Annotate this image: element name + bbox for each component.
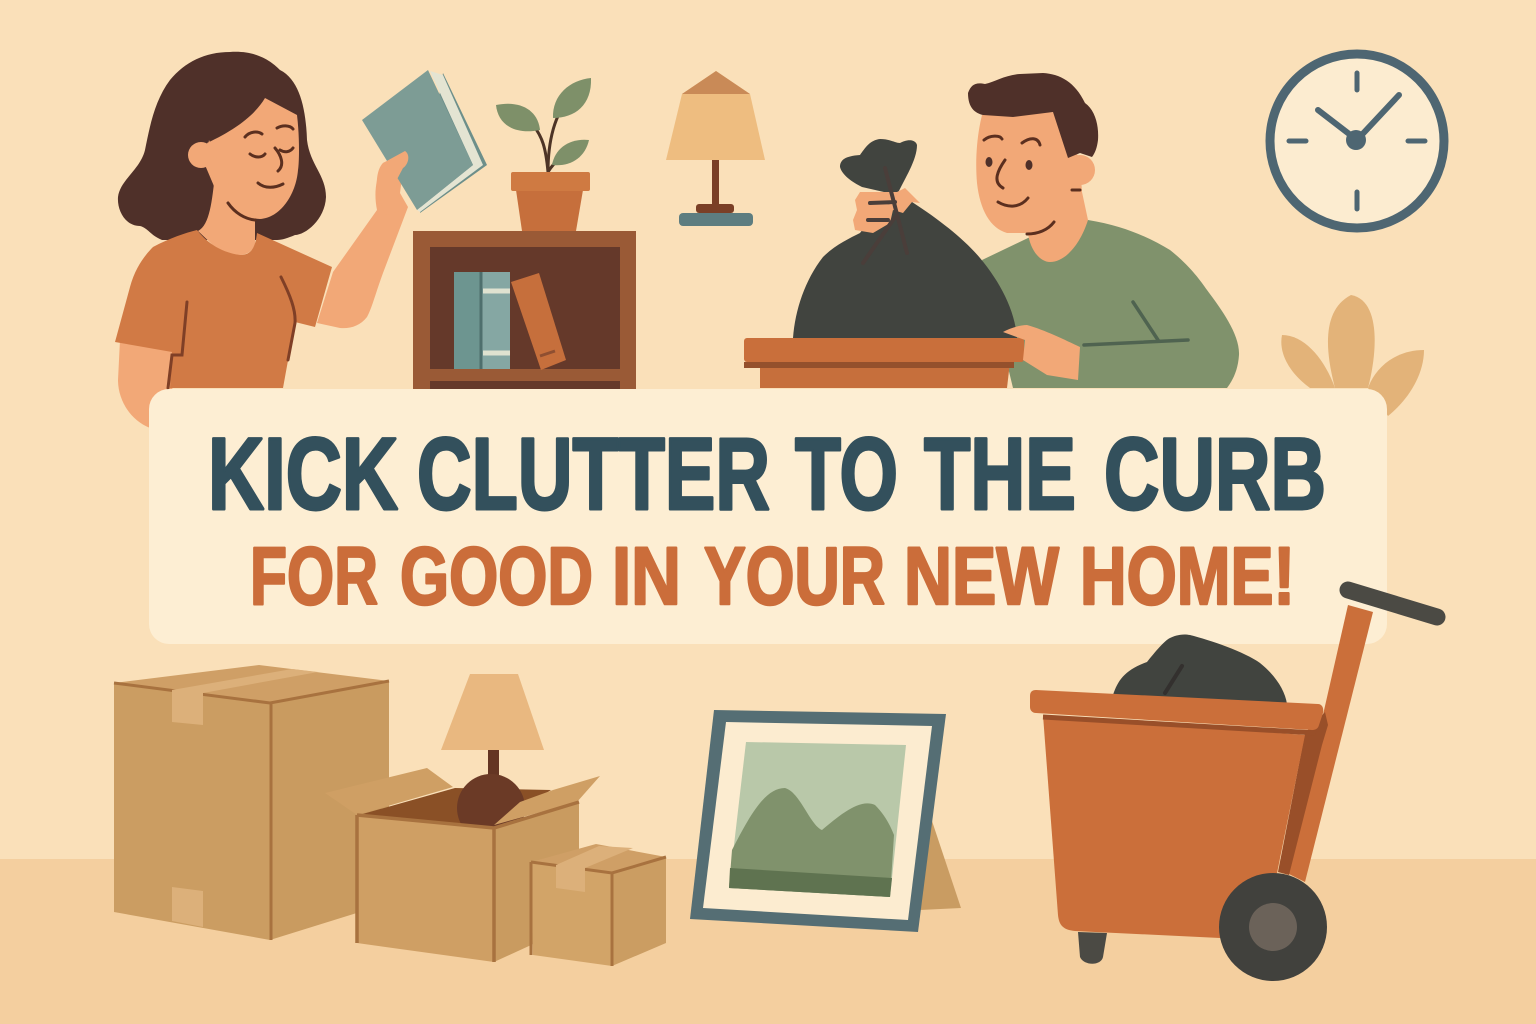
heading: line 1: KICK	[208, 417, 398, 531]
illustration: woman holding a book	[115, 52, 487, 428]
heading: line 2: YOUR	[704, 531, 885, 622]
floor	[0, 859, 1536, 1024]
illustration: picture frame	[690, 710, 961, 932]
heading: line 1: CLUTTER	[417, 417, 770, 531]
bag ties	[863, 168, 907, 263]
icon: wall lamp	[666, 71, 765, 226]
heading: line 2: GOOD	[400, 531, 593, 622]
icon: shelf books	[454, 272, 566, 370]
icon: decorative plant leaves	[1281, 295, 1424, 416]
woman neck	[198, 175, 255, 255]
icon: wall clock	[1270, 54, 1444, 228]
illustration: open box with lamp	[325, 674, 600, 962]
illustration: man with trash bag	[744, 73, 1239, 388]
heading: line 1: TO	[795, 417, 898, 531]
man hand on bag	[853, 188, 920, 233]
icon: trash bin top	[744, 338, 1024, 388]
heading: line 2: HOME!	[1080, 531, 1295, 622]
heading: line 2: FOR	[250, 531, 378, 622]
heading: line 2	[250, 531, 1295, 622]
woman right arm	[317, 152, 408, 328]
icon: lamp in box	[441, 674, 544, 842]
heading: line 2: NEW	[904, 531, 1059, 622]
man neck and face	[976, 112, 1088, 262]
woman left arm	[118, 340, 175, 428]
heading: line 1: THE	[924, 417, 1076, 531]
icon: wheel	[1219, 873, 1327, 981]
man sweater	[982, 220, 1239, 388]
title banner	[149, 389, 1387, 644]
icon: potted plant	[496, 78, 591, 231]
illustration: small box	[531, 844, 666, 966]
icon: trash bag	[793, 139, 1017, 338]
man hair	[968, 73, 1098, 158]
woman facial features	[228, 126, 293, 220]
heading: line 1: CURB	[1104, 417, 1326, 531]
icon: bag in bin	[1113, 634, 1287, 704]
icon: cart handle	[1287, 605, 1373, 882]
icon: held book	[362, 70, 487, 213]
man facial features	[984, 136, 1080, 234]
woman face	[207, 98, 299, 219]
heading: line 1	[208, 417, 1326, 531]
woman shirt	[115, 230, 332, 388]
illustration: bookshelf with plant and books	[413, 78, 636, 389]
illustration: large cardboard box	[114, 665, 389, 940]
illustration: wheeled bin	[1030, 590, 1437, 981]
man hand on bin	[1003, 325, 1080, 380]
heading: line 2: IN	[612, 531, 681, 622]
woman hand on book	[377, 151, 408, 215]
woman hair	[118, 52, 326, 240]
icon: bin body	[1278, 712, 1328, 875]
